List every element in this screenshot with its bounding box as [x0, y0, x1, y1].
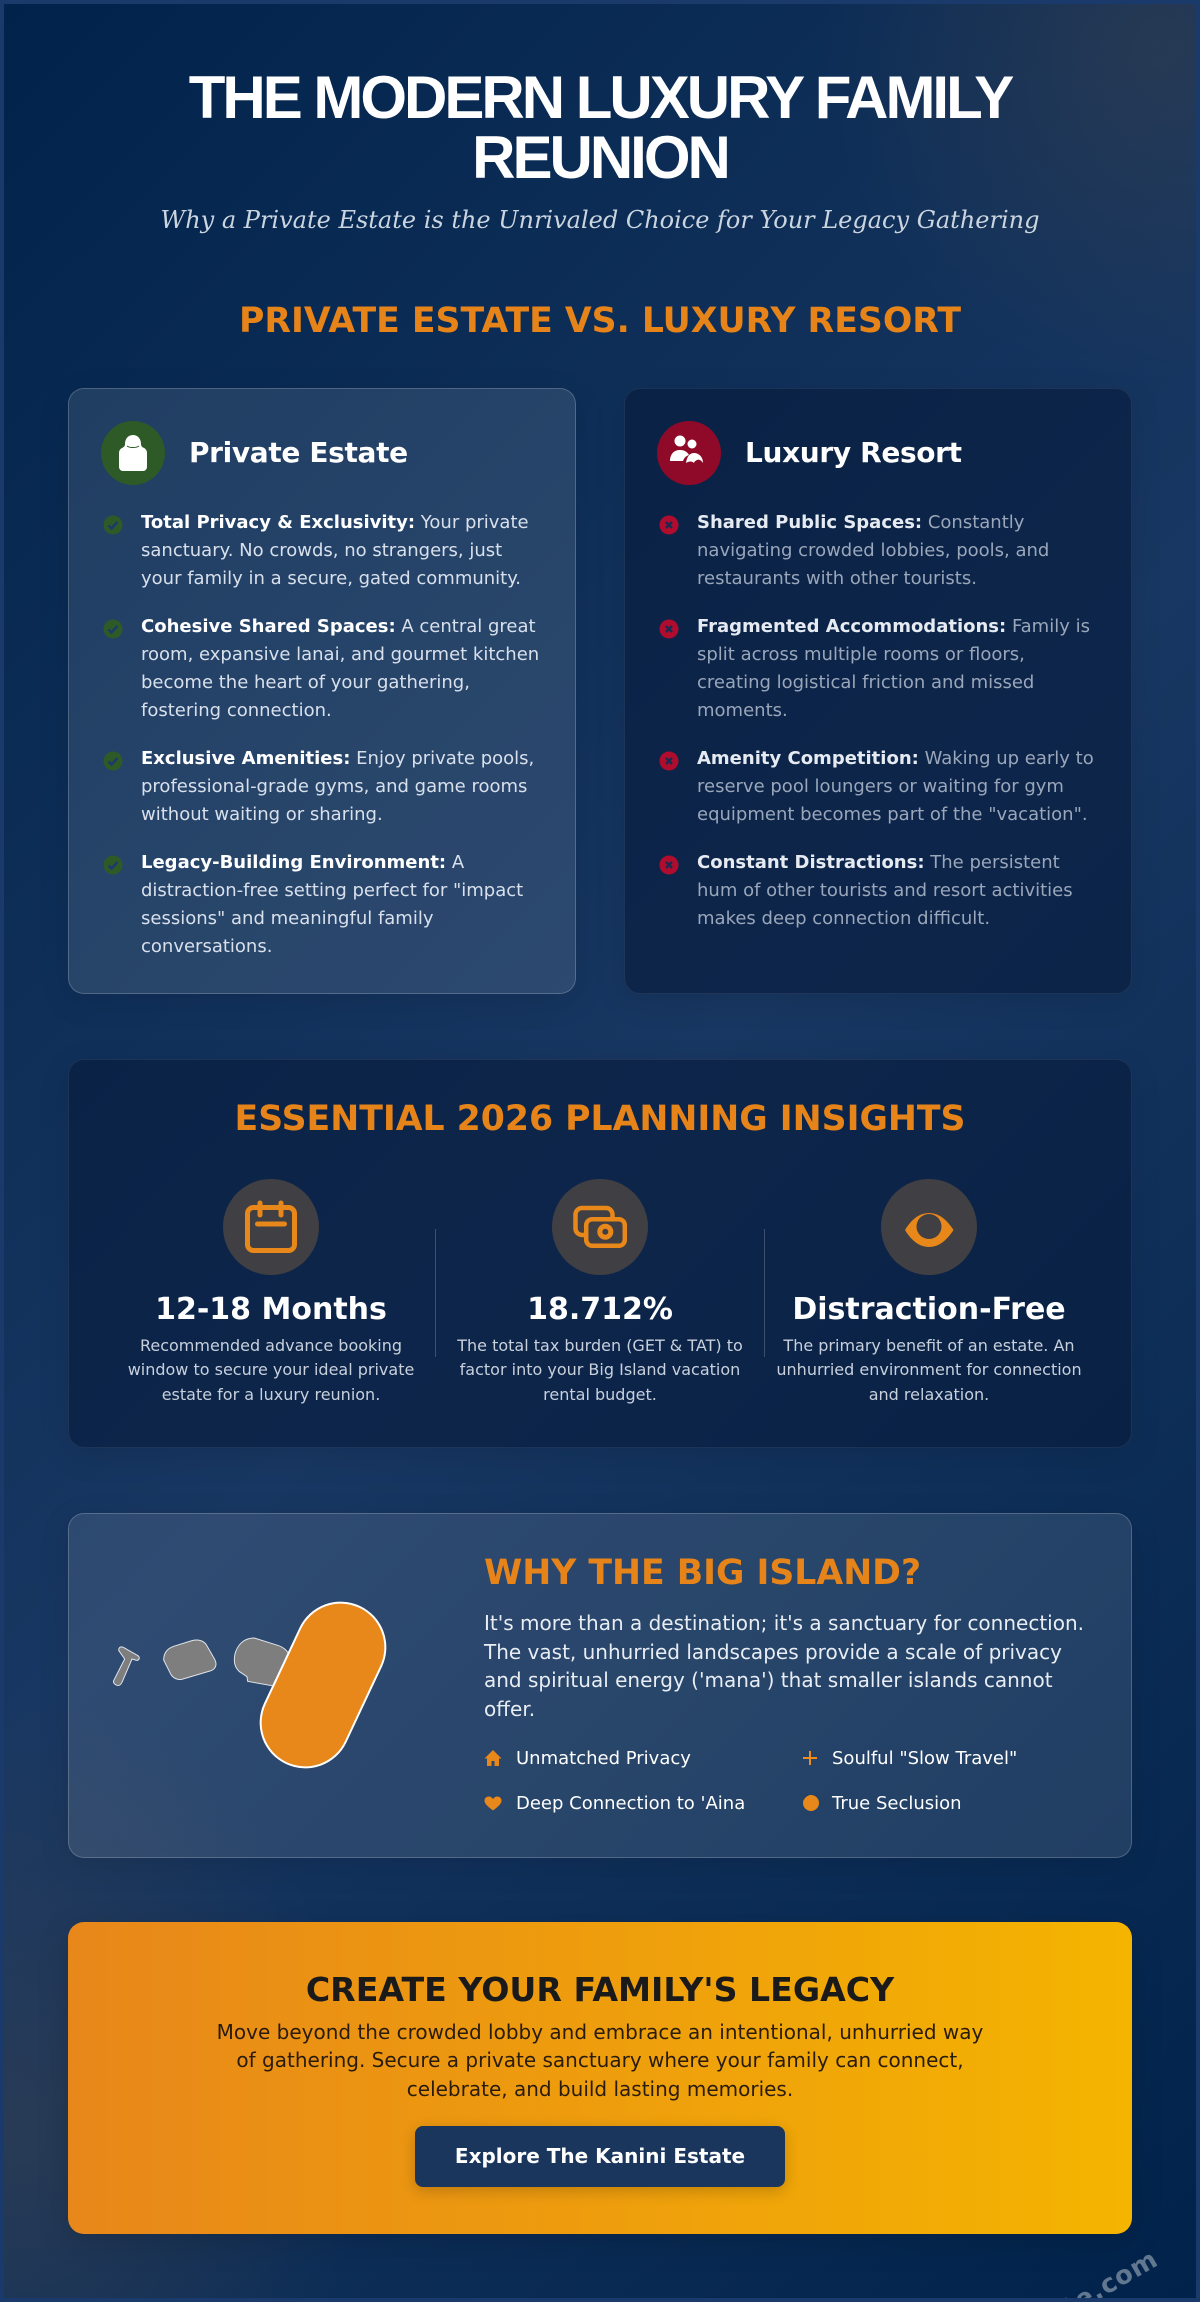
drawback 4: Constant Distractions: The persistent	[697, 852, 1060, 873]
drawback 4	[697, 852, 1073, 929]
heading: big island: WHY THE BIG ISLAND?	[484, 1553, 921, 1593]
benefit 2: Cohesive Shared Spaces: A central great	[141, 616, 536, 637]
feature: privacy: Unmatched Privacy	[516, 1748, 691, 1769]
icon: plus	[803, 1751, 817, 1765]
benefit 4: sessions" and meaningful family	[141, 908, 434, 929]
heading: luxury resort: Luxury Resort	[745, 436, 962, 469]
feature: slow travel: Soulful "Slow Travel"	[832, 1748, 1017, 1769]
stat description: distraction-free: and relaxation.	[869, 1385, 989, 1404]
drawback 2: Fragmented Accommodations: Family is	[697, 616, 1090, 637]
stat description: tax burden: The total tax burden (GET & TAT) to	[457, 1336, 743, 1355]
drawback 4: hum of other tourists and resort activities	[697, 880, 1073, 901]
text block: big island: It's more than a destination; it's a sanctuary for connection.	[484, 1611, 1084, 1635]
drawback 2: moments.	[697, 700, 788, 721]
check icon 1	[104, 516, 122, 534]
stat description: distraction-free: The primary benefit of an estate. An	[783, 1336, 1075, 1355]
button	[415, 2126, 785, 2187]
feature: seclusion: True Seclusion	[832, 1793, 962, 1814]
stat description: distraction-free	[776, 1336, 1082, 1404]
stat: distraction-free: Distraction-Free	[792, 1292, 1066, 1327]
list: private estate benefits	[104, 512, 539, 957]
button: Explore The Kanini Estate	[455, 2144, 745, 2168]
heading: comparison: PRIVATE ESTATE VS. LUXURY RESORT	[239, 301, 961, 341]
list: luxury resort drawbacks	[660, 512, 1094, 929]
panel: private estate	[68, 388, 576, 994]
feature: connection: Deep Connection to 'Aina	[516, 1793, 745, 1814]
drawback 2	[697, 616, 1090, 721]
drawback 3: Amenity Competition: Waking up early to	[697, 748, 1094, 769]
text block: call to action: celebrate, and build lasting memories.	[407, 2077, 793, 2101]
drawback 1: restaurants with other tourists.	[697, 568, 977, 589]
subtitle: Why a Private Estate is the Unrivaled Choice for Your Legacy Gathering	[161, 206, 1039, 234]
drawback 3	[697, 748, 1094, 825]
check icon 4	[104, 856, 122, 874]
text block: call to action: Move beyond the crowded lobby and embrace an intentional, unhurried way	[217, 2020, 983, 2044]
check icon 2	[104, 620, 122, 638]
heading: planning insights: ESSENTIAL 2026 PLANNING INSIGHTS	[235, 1099, 965, 1139]
stat description: tax burden: factor into your Big Island vacation	[460, 1360, 740, 1379]
heading: private estate: Private Estate	[189, 436, 408, 469]
icon: people	[657, 421, 721, 485]
benefit 4: distraction-free setting perfect for "impact	[141, 880, 523, 901]
stat description: booking window: Recommended advance booking	[140, 1336, 402, 1355]
stat description: booking window: window to secure your ideal private	[128, 1360, 414, 1379]
title: THE MODERN LUXURY FAMILY	[189, 64, 1011, 131]
text block: big island: and spiritual energy ('mana') that smaller islands cannot	[484, 1668, 1053, 1692]
text block: big island	[484, 1611, 1084, 1721]
text block: call to action	[217, 2020, 983, 2101]
benefit 3: without waiting or sharing.	[141, 804, 383, 825]
stat description: booking window	[128, 1336, 414, 1404]
drawback 3: equipment becomes part of the "vacation".	[697, 804, 1088, 825]
icon: home	[484, 1750, 502, 1766]
panel: luxury resort	[624, 388, 1132, 994]
cross icon 1	[660, 516, 678, 534]
drawback 4: makes deep connection difficult.	[697, 908, 990, 929]
benefit 3: professional-grade gyms, and game rooms	[141, 776, 527, 797]
benefit 2: fostering connection.	[141, 700, 332, 721]
cross icon 2	[660, 620, 678, 638]
benefit 3	[141, 748, 534, 825]
text block: big island: The vast, unhurried landscapes provide a scale of privacy	[484, 1640, 1062, 1664]
benefit 4: conversations.	[141, 936, 272, 957]
drawback 1: Shared Public Spaces: Constantly	[697, 512, 1024, 533]
title	[189, 64, 1014, 191]
stat: tax burden: 18.712%	[527, 1292, 673, 1327]
benefit 3: Exclusive Amenities: Enjoy private pools,	[141, 748, 534, 769]
stat: booking window: 12-18 Months	[155, 1292, 387, 1327]
title: REUNION	[472, 124, 728, 191]
icon: money	[552, 1179, 648, 1275]
stat description: distraction-free: unhurried environment for connection	[776, 1360, 1082, 1379]
stat description: booking window: estate for a luxury reunion.	[162, 1385, 380, 1404]
cross icon 4	[660, 856, 678, 874]
panel: planning insights	[68, 1059, 1132, 1448]
benefit 2: become the heart of your gathering,	[141, 672, 470, 693]
drawback 1: navigating crowded lobbies, pools, and	[697, 540, 1049, 561]
drawback 3: reserve pool loungers or waiting for gym	[697, 776, 1064, 797]
heading: call to action: CREATE YOUR FAMILY'S LEGACY	[306, 1970, 894, 2009]
cross icon 3	[660, 752, 678, 770]
stat description: tax burden	[457, 1336, 743, 1404]
drawback 2: creating logistical friction and missed	[697, 672, 1034, 693]
benefit 4	[141, 852, 523, 957]
drawback 2: split across multiple rooms or floors,	[697, 644, 1025, 665]
stat description: tax burden: rental budget.	[543, 1385, 657, 1404]
icon: calendar	[223, 1179, 319, 1275]
icon: lock	[101, 421, 165, 485]
icon: moon	[803, 1795, 819, 1811]
icon: eye	[881, 1179, 977, 1275]
text block: big island: offer.	[484, 1697, 535, 1721]
panel: call to action	[68, 1922, 1132, 2234]
check icon 3	[104, 752, 122, 770]
text block: call to action: of gathering. Secure a private sanctuary where your family can connect,	[236, 2048, 964, 2072]
benefit 2	[141, 616, 539, 721]
drawback 1	[697, 512, 1049, 589]
benefit 1: your family in a secure, gated community.	[141, 568, 521, 589]
benefit 1	[141, 512, 529, 589]
panel: big island	[68, 1513, 1132, 1858]
benefit 4: Legacy-Building Environment: A	[141, 852, 464, 873]
icon: heart	[484, 1796, 502, 1810]
benefit 2: room, expansive lanai, and gourmet kitchen	[141, 644, 539, 665]
map: Hawaiian islands	[113, 1602, 386, 1768]
divider	[435, 1229, 436, 1357]
benefit 1: sanctuary. No crowds, no strangers, just	[141, 540, 502, 561]
benefit 1: Total Privacy & Exclusivity: Your private	[141, 512, 529, 533]
